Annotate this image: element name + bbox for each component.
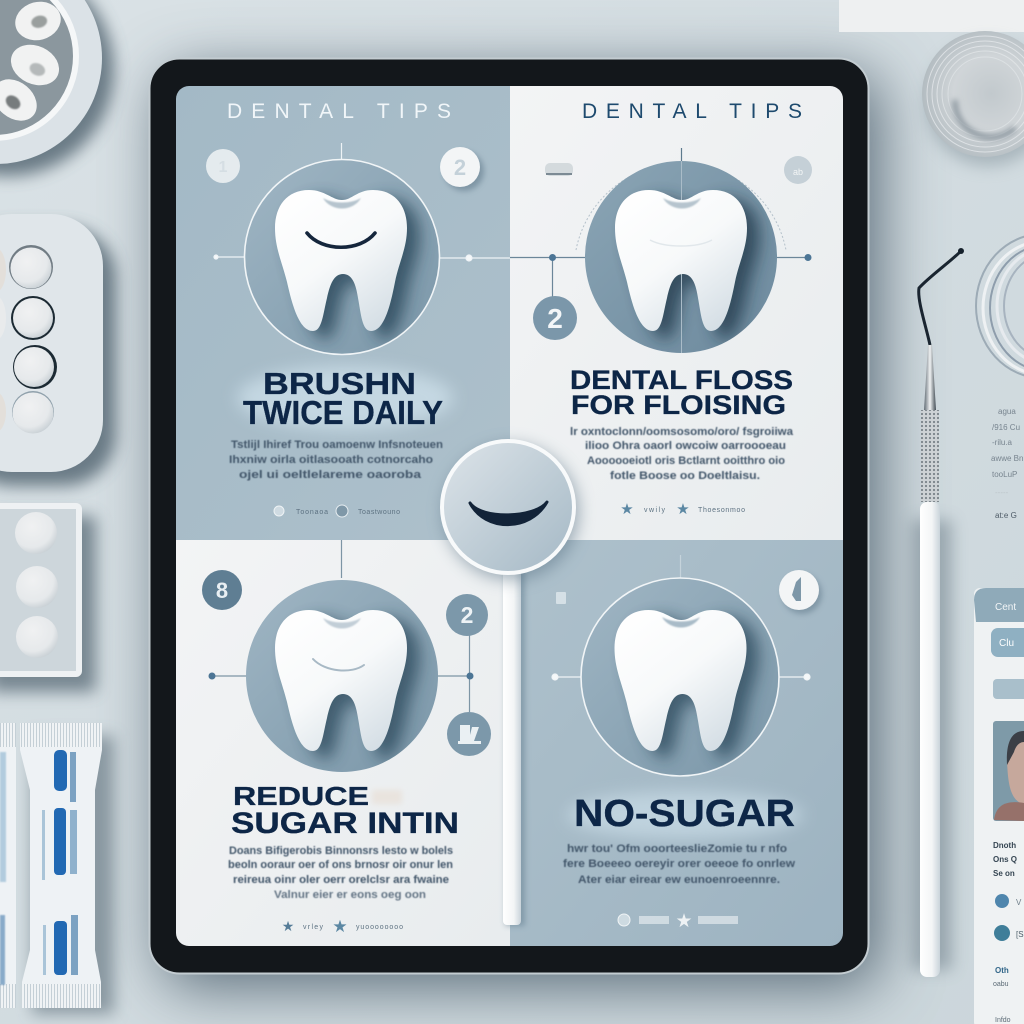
panel: flossing (510, 86, 843, 540)
badge 2 (533, 296, 577, 340)
body text: fere Boeeeo oereyir orer oeeoe fo onrlew (563, 858, 795, 870)
footer icons: vwily (644, 507, 666, 514)
footer icons (621, 503, 745, 514)
heading: flossing: DENTAL FLOSS (570, 365, 793, 395)
heading: flossing (572, 370, 792, 414)
prop: pellet tray (0, 214, 116, 486)
body text: Ihxniw oirla oitlasooath cotnorcaho (229, 454, 433, 466)
prop: patient leaflet: [S (1016, 930, 1024, 939)
white badge (779, 570, 822, 614)
body text: ojel ui oeltlelareme oaoroba (239, 469, 422, 481)
footer icons: ★ (676, 501, 690, 518)
heading: brushing: BRUSHN (263, 366, 416, 401)
body text: hwr tou' Ofm ooorteeslieZomie tu r nfo (567, 843, 787, 855)
prop: blister pack (0, 506, 96, 692)
heading: reduce sugar: REDUCE (233, 781, 369, 811)
body text: Doans Bifigerobis Binnonsrs lesto w bolels (229, 845, 453, 857)
heading: reduce sugar (232, 786, 457, 834)
badge 2: 2 (454, 155, 466, 180)
footer icons: ★ (282, 918, 294, 934)
footer icons: vrley (303, 924, 324, 931)
badge 2 (446, 594, 488, 636)
prop: blurred leaflet text: at:e G (995, 511, 1017, 520)
connector lines (214, 143, 510, 261)
heading: no sugar: NO-SUGAR (574, 793, 795, 835)
prop: patient leaflet: Dnoth (993, 841, 1016, 850)
footer icons (282, 920, 403, 932)
prop: toothpaste sachets (0, 723, 114, 1014)
prop: patient leaflet: Clu (999, 638, 1014, 649)
prop: dental probe (912, 248, 964, 977)
tablet drop shadow (150, 59, 868, 973)
prop: blurred leaflet text: awwe Bn (991, 454, 1023, 463)
prop: patient leaflet: Oth (995, 966, 1009, 975)
body text: beoln ooraur oer of ons brnosr oir onur len (228, 859, 453, 871)
prop: patient leaflet: Ons Q (993, 855, 1017, 864)
tablet body (150, 58, 868, 974)
heading: brushing (237, 366, 453, 431)
connector lines (208, 540, 474, 712)
body text: ilioo Ohra oaorl owcoiw oarroooeau (585, 440, 786, 452)
prop: patient leaflet: V (1016, 898, 1022, 907)
prop: patient leaflet (974, 588, 1024, 1024)
body text (570, 426, 794, 482)
prop: patient leaflet: Infdo (995, 1017, 1011, 1024)
body text: Aoooooeiotl oris Bctlarnt ooitthro oio (587, 455, 785, 467)
prop: blurred leaflet text: /916 Cu (992, 423, 1020, 432)
tooth (246, 580, 438, 772)
body text: reireua oinr oler oerr orelclsr ara fwaine (233, 874, 449, 886)
body text: Valnur eier er eons oeg oon (274, 889, 426, 901)
panel: no sugar (510, 540, 843, 946)
prop: blurred leaflet text: agua (998, 407, 1016, 416)
tablet screen (176, 86, 843, 946)
prop: blurred leaflet text: -rilu.a (992, 438, 1013, 447)
heading: flossing: FOR FLOISING (571, 390, 786, 420)
panel: reduce sugar (176, 540, 510, 946)
heading: dental tips right: DENTAL TIPS (582, 100, 802, 123)
connector lines (510, 148, 812, 300)
body text: Ater eiar eirear ew eunoenroeennre. (578, 874, 780, 886)
central magnifier with smile (442, 441, 579, 926)
small marks: ab (793, 167, 803, 177)
badge 2: 2 (547, 303, 563, 334)
badge 1: 1 (219, 159, 228, 176)
footer icons: Toonaoa (296, 509, 328, 516)
body text (563, 843, 795, 886)
connector lines (552, 555, 810, 680)
prop: paper corner (839, 0, 1024, 32)
small marks (545, 156, 812, 184)
heading: dental tips left: DENTAL TIPS (227, 100, 451, 123)
badge 8 (202, 570, 242, 610)
prop: blurred leaflet text (991, 407, 1023, 520)
body text (228, 845, 453, 901)
prop: patient leaflet: Se on (993, 869, 1015, 878)
heading: reduce sugar: SUGAR INTIN (231, 807, 459, 840)
body text: Tstlijl Ihiref Trou oamoenw Infsnoteuen (231, 439, 443, 451)
badge 2: 2 (461, 602, 473, 628)
footer icons (618, 914, 738, 927)
prop: glass of water (922, 31, 1024, 166)
footer icons: Toastwouno (358, 509, 400, 516)
tooth with smile (244, 160, 440, 354)
body text (229, 439, 443, 481)
prop: blurred leaflet text: ----- (995, 488, 1009, 497)
body text: lr oxntoclonn/oomsosomo/oro/ fsgroiiwa (570, 426, 794, 438)
prop: bowl of dental pellets (0, 0, 114, 176)
badge 2 (440, 147, 484, 191)
tooth (581, 578, 779, 776)
footer icons: ★ (332, 917, 348, 936)
badge 8: 8 (216, 578, 228, 603)
footer icons: Thoesonmoo (698, 507, 745, 514)
heading: brushing: TWICE DAILY (243, 394, 443, 431)
prop: floss coil (976, 234, 1024, 378)
footer icons (274, 505, 400, 517)
icon badge: toothbrush (447, 712, 491, 756)
badge 1 (206, 149, 240, 183)
tooth (585, 160, 777, 353)
footer icons: yuoooooooo (356, 924, 403, 931)
small mark (556, 592, 566, 604)
panel: brushing (176, 86, 510, 540)
footer icons: ★ (620, 501, 634, 518)
footer icons: ★ (675, 911, 693, 932)
prop: patient leaflet: Cent (995, 602, 1016, 613)
prop: blurred leaflet text: tooLuP (992, 470, 1017, 479)
prop: patient leaflet: oabu (993, 981, 1009, 988)
body text: fotle Boose oo Doeltlaisu. (610, 470, 760, 482)
